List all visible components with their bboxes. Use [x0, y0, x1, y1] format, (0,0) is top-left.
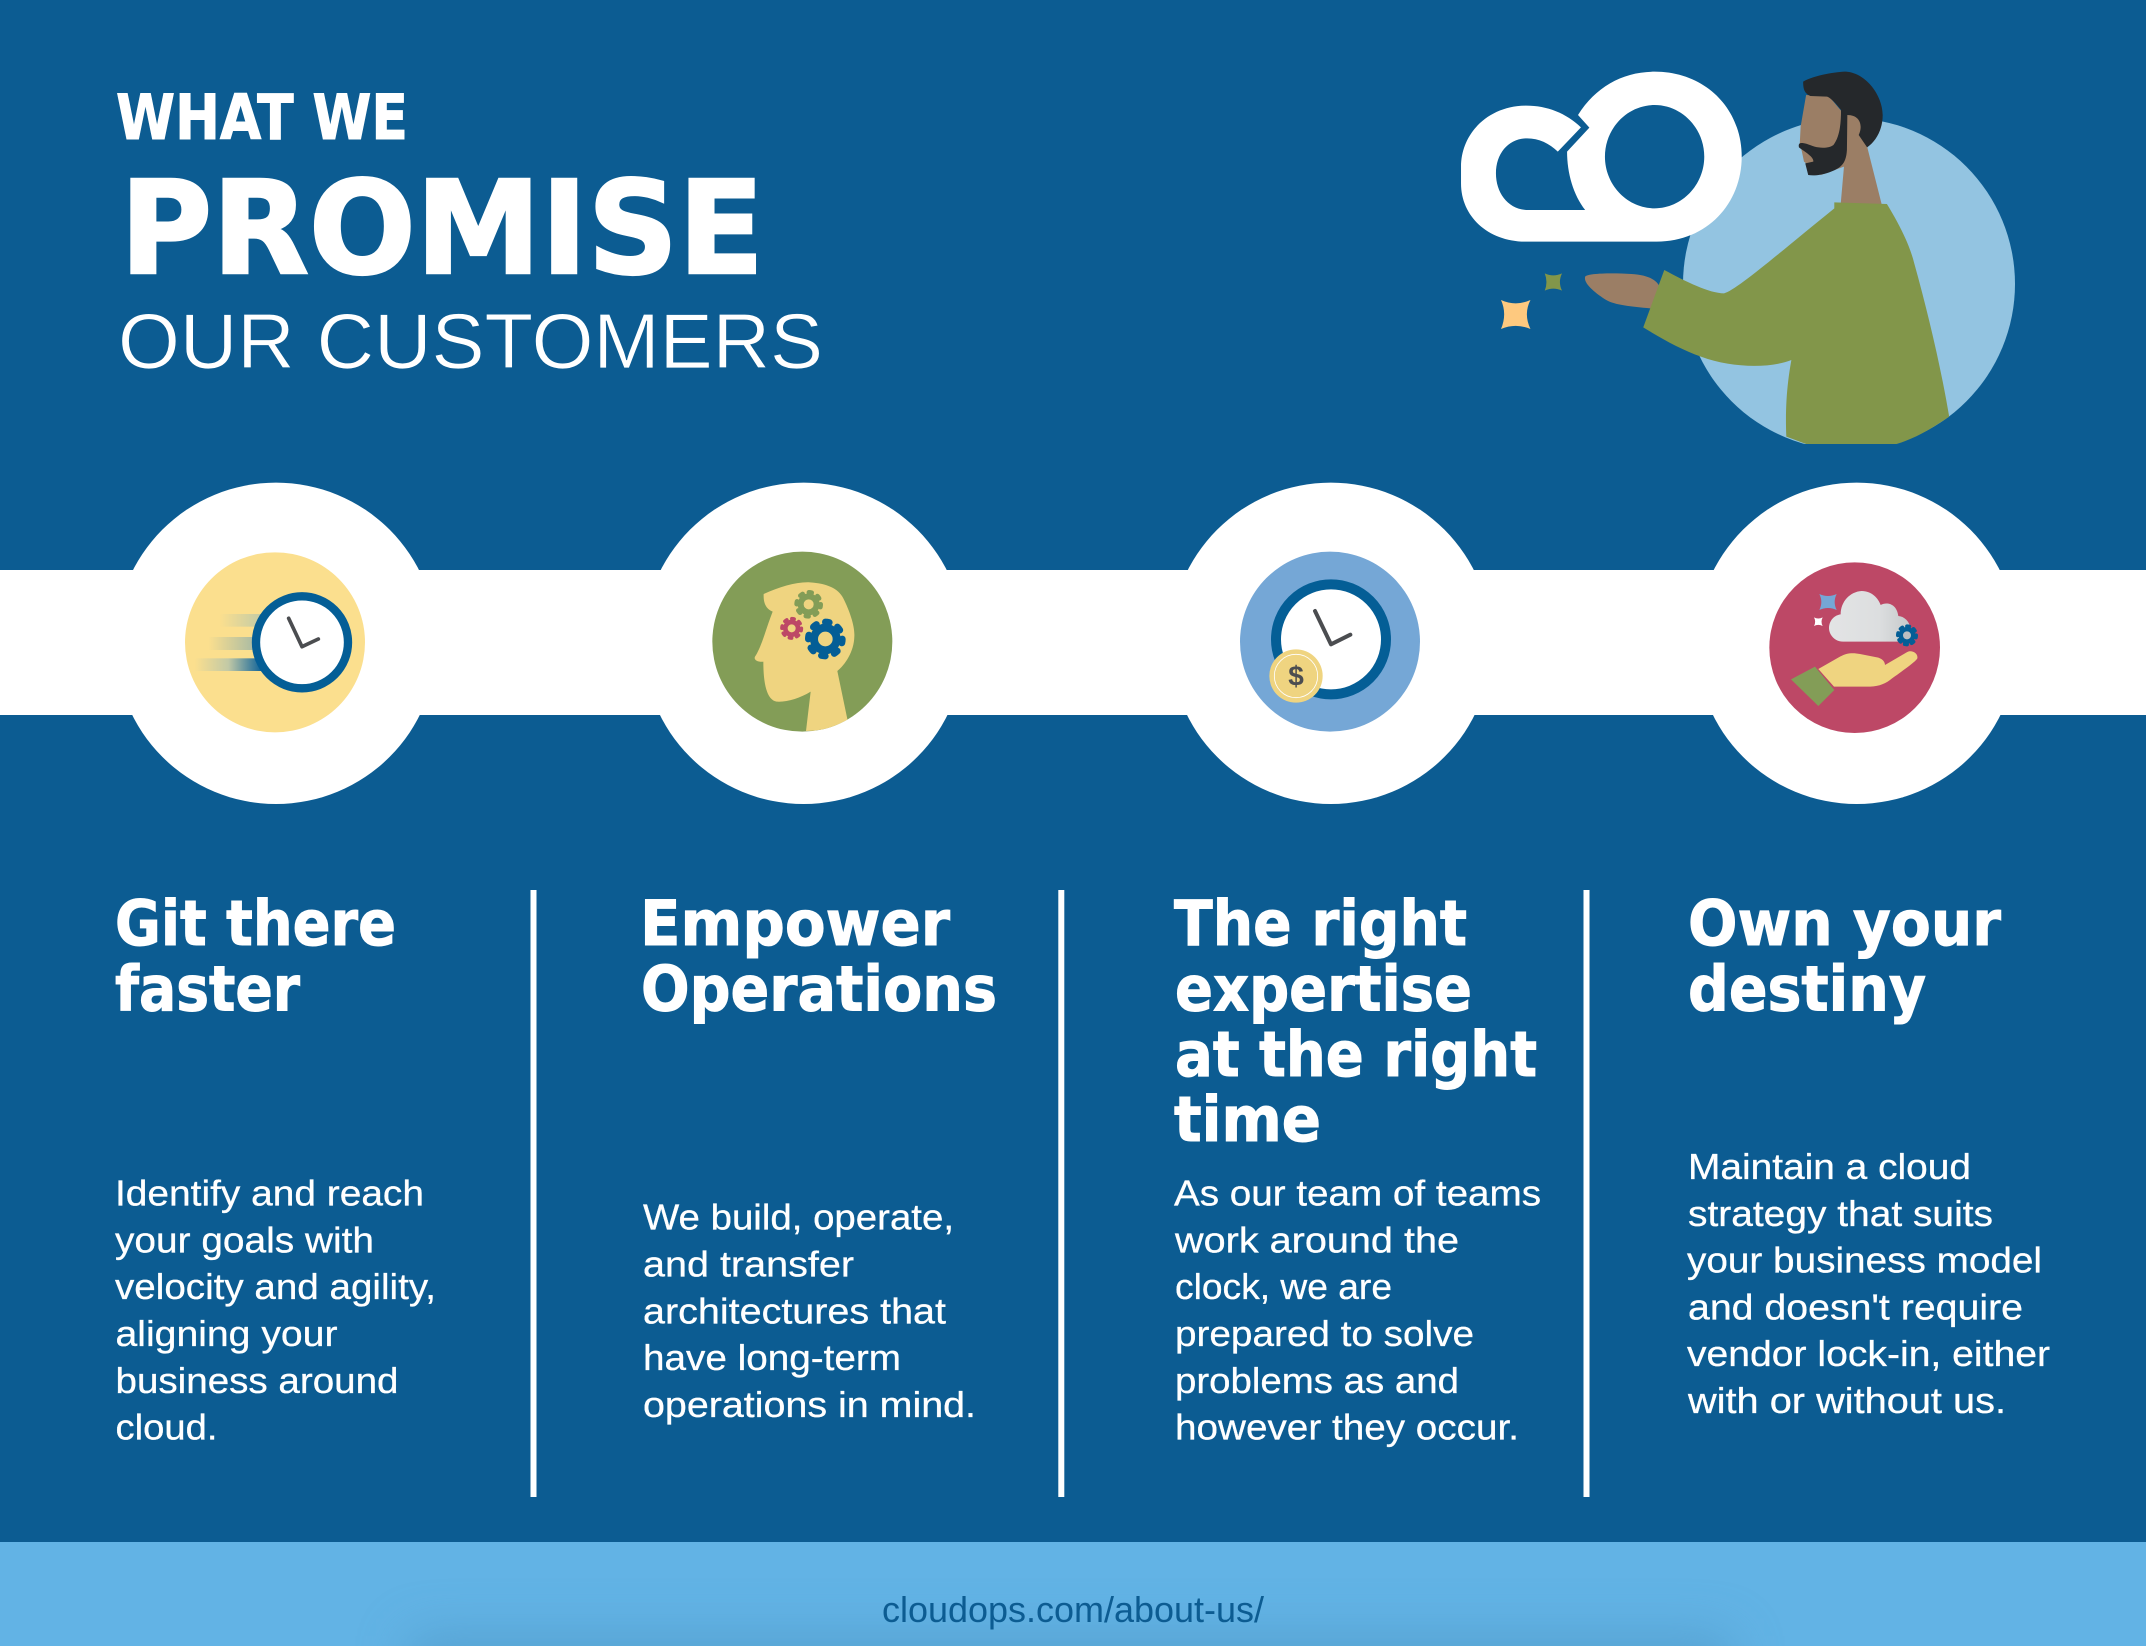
- heading: [115, 887, 396, 1025]
- icon: clock with coin: $: [1288, 661, 1304, 692]
- body text: As our team of teams: [1174, 1173, 1541, 1214]
- heading: destiny: [1688, 952, 1926, 1025]
- heading: [1688, 887, 2001, 1025]
- body text: cloud.: [116, 1407, 218, 1448]
- body text: operations in mind.: [643, 1384, 976, 1425]
- CloudOps logo: [1461, 72, 1742, 242]
- column 3: The right expertise at the right time: [1174, 887, 1541, 1448]
- column 4: Own your destiny: [1687, 887, 2050, 1421]
- heading: The right: [1174, 887, 1467, 960]
- heading: faster: [115, 952, 300, 1025]
- body text: prepared to solve: [1175, 1313, 1474, 1354]
- title: WHAT WE: [116, 81, 408, 154]
- body text: strategy that suits: [1688, 1193, 1993, 1234]
- body text: work around the: [1174, 1219, 1459, 1260]
- body text: problems as and: [1175, 1360, 1459, 1401]
- body text: with or without us.: [1687, 1380, 2006, 1421]
- white band with circles: [0, 483, 2146, 804]
- column 2: Empower Operations: [640, 887, 997, 1425]
- title: PROMISE: [120, 154, 764, 304]
- body text: velocity and agility,: [115, 1266, 436, 1307]
- heading: Empower: [640, 887, 950, 960]
- title: [116, 81, 823, 385]
- footer link text: cloudops.com/about-us/: [882, 1589, 1264, 1630]
- heading: Git there: [115, 887, 396, 960]
- heading: [1174, 887, 1537, 1156]
- sparkles: [1501, 273, 1562, 329]
- column 1: Git there faster: [115, 887, 436, 1448]
- body text: business around: [116, 1360, 399, 1401]
- footer bar: [0, 1542, 2146, 1646]
- icon: clock with coin: [1240, 552, 1420, 732]
- title: OUR CUSTOMERS: [118, 297, 823, 385]
- body text: [115, 1173, 436, 1448]
- body text: and transfer: [643, 1244, 854, 1284]
- body text: aligning your: [116, 1313, 338, 1354]
- icon: head with gears: [712, 552, 892, 732]
- icon: hand holding cloud: [1769, 562, 1940, 733]
- person figure: [1585, 72, 1949, 444]
- icon: fast clock: [185, 552, 365, 732]
- body text: [1174, 1173, 1541, 1448]
- body text: architectures that: [643, 1290, 946, 1331]
- body text: We build, operate,: [643, 1197, 954, 1238]
- heading: time: [1174, 1083, 1321, 1156]
- body text: and doesn't require: [1688, 1286, 2023, 1327]
- body text: [1687, 1146, 2050, 1421]
- body text: Identify and reach: [115, 1173, 424, 1214]
- heading: Operations: [641, 952, 997, 1025]
- body text: your business model: [1687, 1240, 2042, 1281]
- illustration: person with cloud logo: [1461, 72, 2015, 450]
- heading: [640, 887, 997, 1025]
- body text: your goals with: [115, 1219, 374, 1260]
- body text: Maintain a cloud: [1688, 1146, 1971, 1187]
- heading: at the right: [1175, 1018, 1537, 1091]
- heading: expertise: [1175, 952, 1472, 1025]
- body text: however they occur.: [1175, 1407, 1519, 1448]
- body text: have long-term: [643, 1337, 901, 1378]
- illustration backdrop circle: [1683, 118, 2015, 450]
- body text: vendor lock-in, either: [1687, 1333, 2050, 1374]
- body text: clock, we are: [1175, 1266, 1392, 1307]
- body text: [643, 1197, 976, 1425]
- heading: Own your: [1688, 887, 2001, 960]
